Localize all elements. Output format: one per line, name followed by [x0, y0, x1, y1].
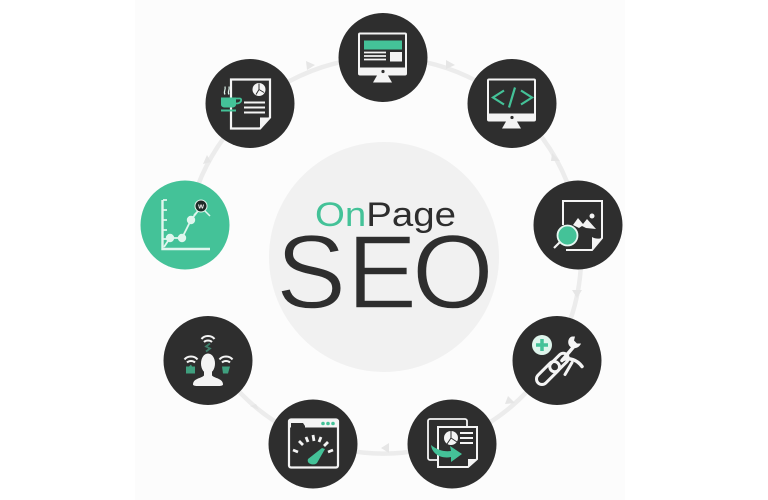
title: SEO: O	[412, 214, 494, 331]
icon: code monitor	[468, 59, 556, 148]
ring connector with arrows	[187, 58, 582, 454]
icon: content document with coffee	[206, 59, 294, 148]
title: SEO: E	[347, 214, 417, 331]
icon: link building	[512, 316, 602, 405]
center circle	[269, 142, 499, 372]
icon: copied content pages	[408, 400, 496, 488]
icon: keyword ranking chart	[140, 180, 230, 270]
icon: page speed gauge	[268, 400, 358, 488]
icon: keyword ranking chart: w	[197, 202, 204, 210]
title: SEO: S	[276, 214, 346, 331]
title: OnPage: OnPage	[315, 196, 456, 234]
icon: image search	[534, 180, 622, 270]
icon: social user	[164, 316, 252, 405]
icon: web page layout monitor	[338, 13, 428, 102]
